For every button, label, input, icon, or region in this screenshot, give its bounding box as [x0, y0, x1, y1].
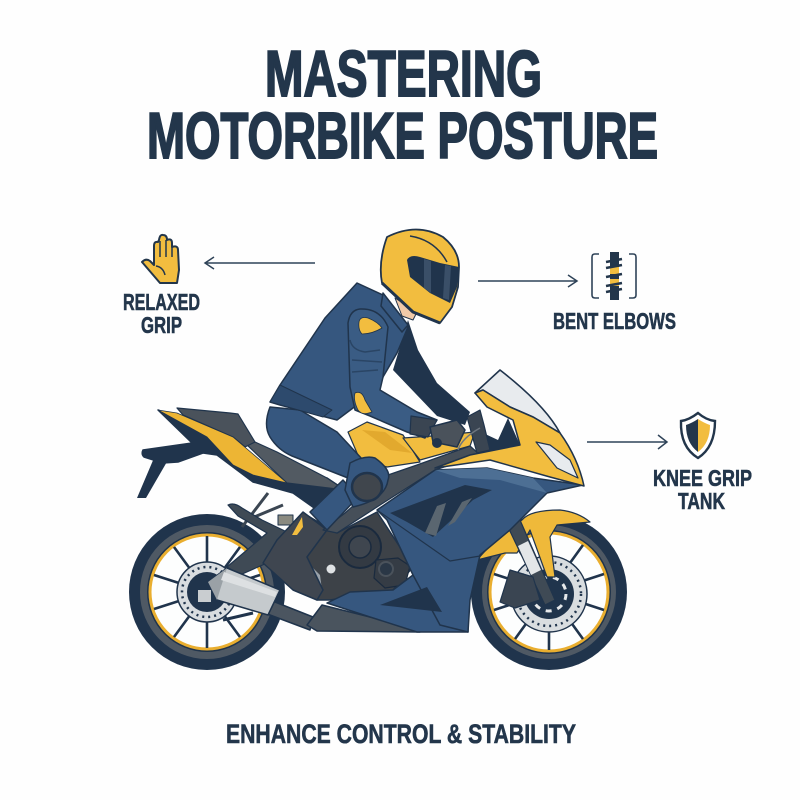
front wheel [471, 514, 627, 670]
motorcycle with rider [129, 230, 627, 670]
tank [348, 422, 475, 467]
arrow: to knee grip [587, 435, 667, 449]
rider lower leg [310, 480, 358, 530]
frame spar [323, 446, 480, 533]
text: knee grip tank [653, 465, 752, 514]
label: knee grip tank [653, 413, 752, 514]
title: MASTERING [265, 37, 542, 110]
tail cowl yellow [158, 410, 287, 483]
exhaust pipe [262, 600, 313, 630]
text: relaxed grip: GRIP [141, 312, 182, 338]
far arm [393, 320, 470, 425]
lower engine cover [307, 605, 425, 632]
label: relaxed grip [123, 235, 200, 338]
title [147, 37, 658, 172]
rider near arm [348, 309, 437, 438]
rider neck [395, 298, 417, 320]
fairing blue [377, 468, 583, 632]
arrow: to relaxed grip [205, 257, 315, 269]
fairing belly [327, 575, 468, 632]
front fork [508, 520, 555, 605]
brake caliper [500, 570, 540, 608]
rear hugger and swingarm [227, 504, 287, 575]
rider boot [263, 512, 327, 600]
label: bent elbows [553, 252, 676, 334]
footer tagline: ENHANCE CONTROL & STABILITY [226, 719, 576, 749]
rider jacket [270, 283, 408, 420]
windshield [475, 370, 560, 433]
front fender [477, 510, 590, 577]
helmet [381, 230, 459, 323]
tail under-structure and plate hanger [142, 410, 345, 510]
text: knee grip tank: KNEE GRIP [653, 465, 752, 491]
text: knee grip tank: TANK [678, 488, 725, 514]
headlight [536, 442, 578, 478]
seat [247, 442, 345, 490]
engine [300, 512, 413, 600]
text: relaxed grip [123, 289, 200, 338]
icon: shield [681, 413, 715, 458]
icon: hand [142, 235, 179, 283]
subframe struts [242, 493, 283, 527]
elbow armour [354, 392, 372, 414]
upper fairing yellow [435, 390, 584, 486]
tail cowl dark top [177, 408, 255, 447]
knee pad [345, 457, 389, 507]
shoulder armour [359, 318, 382, 334]
dark cockpit [483, 418, 520, 455]
exhaust muffler [208, 568, 280, 615]
text: relaxed grip: RELAXED [123, 289, 200, 315]
icon: suspension spring [592, 252, 636, 300]
tag plate [278, 515, 293, 525]
licence plate hanger [137, 458, 168, 498]
text: bent elbows: BENT ELBOWS [553, 308, 676, 334]
glove and clip-on [410, 410, 490, 453]
rider thigh [266, 407, 363, 478]
rear wheel [129, 514, 285, 670]
arrow: to bent elbows [478, 275, 577, 287]
